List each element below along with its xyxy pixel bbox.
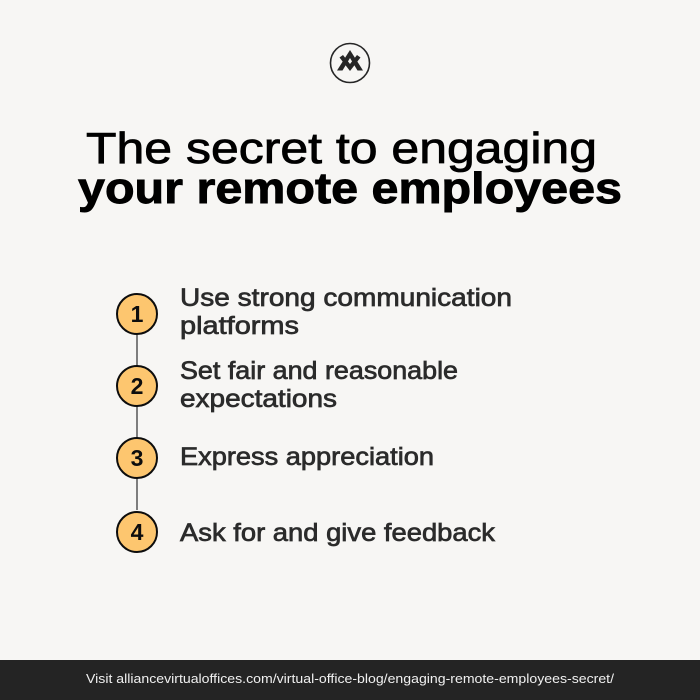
- step 4 text: Ask for and give feedback: [180, 519, 496, 547]
- step 4 marker: 4: [131, 519, 144, 545]
- step 1 text: platforms: [180, 312, 299, 340]
- step 2 text: Set fair and reasonable: [180, 357, 458, 385]
- footer bar: Visit alliancevirtualoffices.com/virtual-office-blog/engaging-remote-employees-secret/: [86, 671, 614, 686]
- step 2 marker: [117, 366, 157, 406]
- icon: logo: [330, 44, 370, 82]
- footer bar: [0, 660, 700, 700]
- step 1 text: Use strong communication: [180, 284, 512, 312]
- timeline: numbered steps: [117, 294, 157, 552]
- step 4 marker: [117, 512, 157, 552]
- step 2 text: [180, 357, 458, 413]
- title: your remote employees: [78, 164, 622, 213]
- step 3 marker: [117, 438, 157, 478]
- step 3 text: Express appreciation: [180, 443, 434, 471]
- step 1 marker: [117, 294, 157, 334]
- step 3 marker: 3: [131, 445, 143, 471]
- step 1 marker: 1: [131, 301, 144, 327]
- step 2 text: expectations: [180, 385, 337, 413]
- title: The secret to engaging: [86, 124, 597, 173]
- step 1 text: [180, 284, 512, 340]
- step 2 marker: 2: [131, 373, 143, 399]
- title: [78, 124, 622, 213]
